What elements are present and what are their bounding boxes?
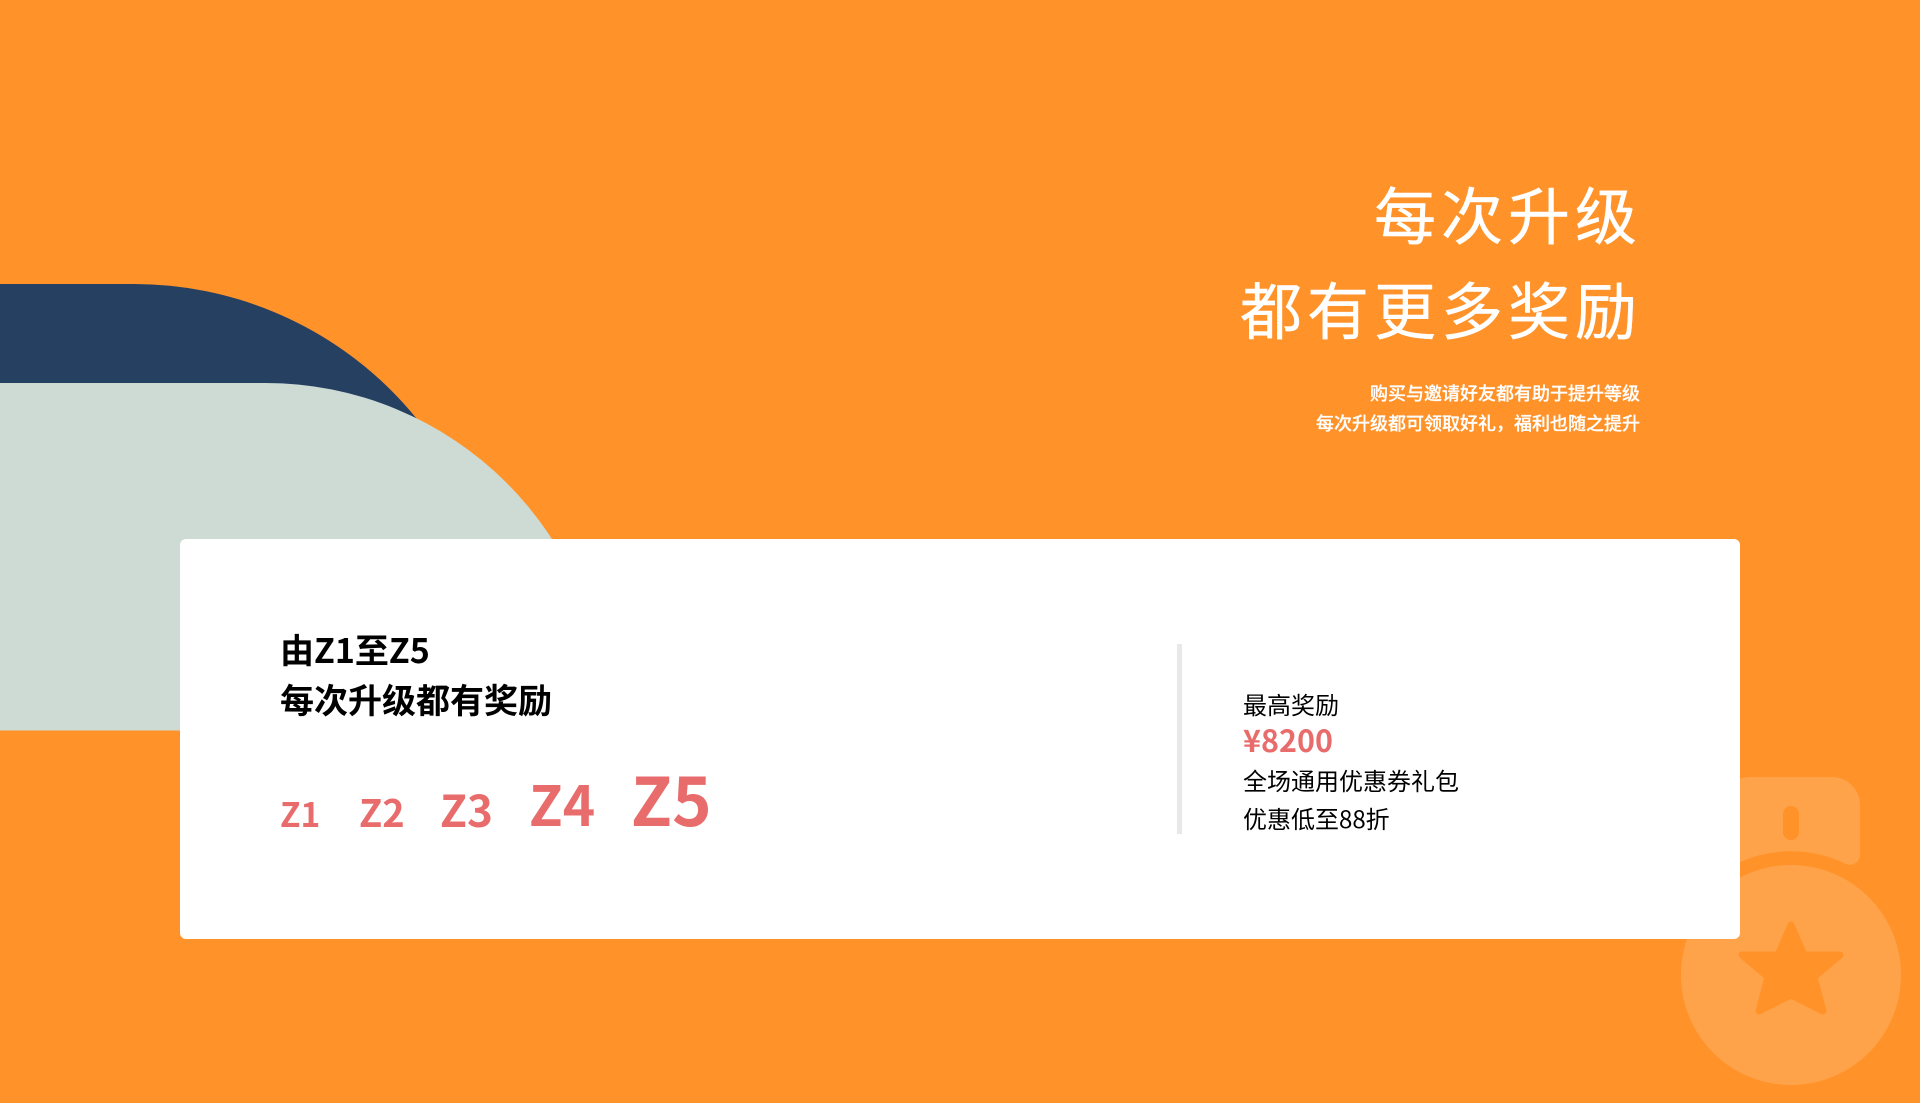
reward label: 最高奖励 — [1243, 686, 1339, 721]
reward amount: ¥8200 — [1243, 717, 1333, 761]
heading — [280, 624, 552, 723]
heading: 由Z1至Z5 — [280, 624, 430, 673]
subtitle line 1: 购买与邀请好友都有助于提升等级 — [1370, 380, 1640, 406]
mint curved shape — [0, 383, 606, 730]
level Z4: Z4 — [529, 762, 595, 842]
panel: white card — [180, 539, 1740, 939]
reward description line 2: 优惠低至88折 — [1243, 800, 1390, 835]
level labels Z1 to Z5 — [280, 749, 712, 846]
title — [1240, 167, 1642, 352]
title line 2: 都有更多奖励 — [1240, 262, 1642, 352]
level Z5: Z5 — [631, 749, 712, 846]
subtitle text — [1316, 380, 1640, 436]
subtitle line 2: 每次升级都可领取好礼，福利也随之提升 — [1316, 410, 1640, 436]
title line 1: 每次升级 — [1374, 167, 1642, 257]
reward text block — [1243, 686, 1459, 835]
divider — [1177, 644, 1182, 834]
reward description line 1: 全场通用优惠券礼包 — [1243, 762, 1459, 797]
level Z2: Z2 — [359, 783, 405, 838]
heading: 每次升级都有奖励 — [280, 674, 552, 723]
navy curved shape — [0, 284, 498, 730]
level Z1: Z1 — [280, 788, 320, 837]
level Z3: Z3 — [440, 776, 493, 840]
icon: medal — [1681, 777, 1901, 1085]
